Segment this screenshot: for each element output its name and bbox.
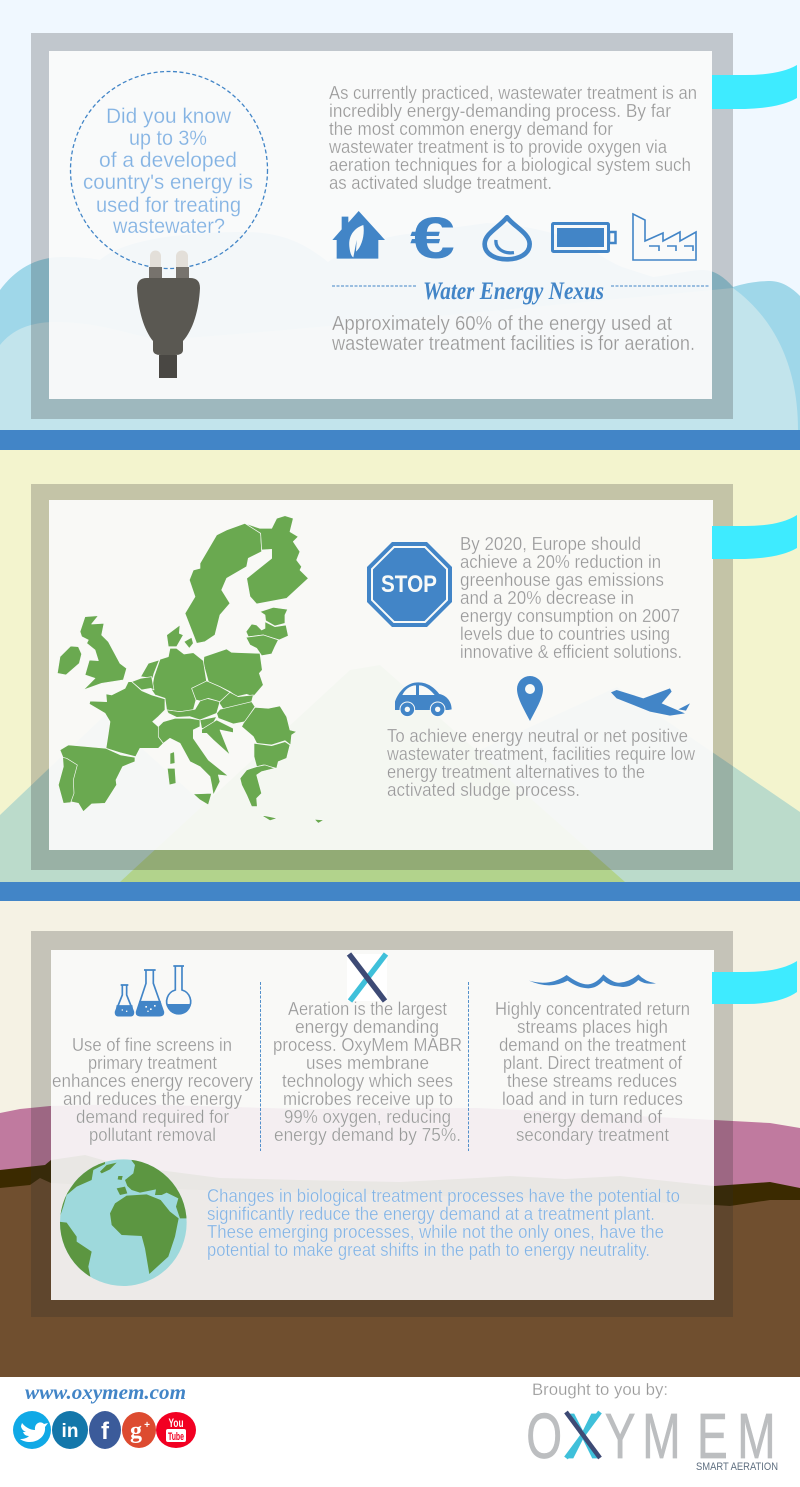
text: aeration intro: As currently practiced, wastewater treatment is an <box>329 83 697 103</box>
panel: energy demand <box>31 33 733 419</box>
social icons: + <box>144 1420 150 1431</box>
ribbon: section 2 <box>712 515 797 559</box>
text: 2020 targets: innovative & efficient solutions. <box>460 642 682 662</box>
social icons: in <box>62 1421 78 1442</box>
text: low energy alternatives: To achieve energy neutral or net positive <box>387 726 688 746</box>
text: oxymem mabr: 99% oxygen, reducing <box>284 1107 451 1127</box>
text: low energy alternatives: activated sludge process. <box>387 780 580 800</box>
text: aeration intro: as activated sludge treatment. <box>329 173 552 193</box>
text: fine screens: primary treatment <box>88 1053 217 1073</box>
icon: water drop <box>485 217 530 259</box>
panel: european targets <box>31 484 733 870</box>
text: low energy alternatives: energy treatment alternatives to the <box>387 762 645 782</box>
text: 2020 targets: achieve a 20% reduction in <box>460 552 661 572</box>
social icons: Tube <box>168 1431 184 1443</box>
text: biological processes: potential to make great shifts in the path to energy neutrality. <box>207 1240 650 1260</box>
text: oxymem mabr <box>273 999 462 1145</box>
social icons <box>13 1411 196 1449</box>
text: oxymem mabr: technology which sees <box>282 1071 453 1091</box>
text: return streams: Highly concentrated return <box>495 999 690 1019</box>
icon: map pin <box>517 676 543 721</box>
social icons: g <box>130 1418 142 1444</box>
text: aeration intro: aeration techniques for a biological system such <box>329 155 691 175</box>
icon: oxymem x <box>347 954 387 1001</box>
text: aeration share: wastewater treatment facilities is for aeration. <box>331 333 695 355</box>
social icons: You <box>168 1416 184 1430</box>
ribbon: section 3 <box>712 961 797 1004</box>
text: aeration intro <box>328 83 697 193</box>
website link: www.oxymem.com <box>25 1380 186 1404</box>
text: return streams: streams places high <box>517 1017 668 1037</box>
logo: oxymem: SMART AERATION <box>696 1461 778 1473</box>
callout: did you know: of a developed <box>99 149 237 172</box>
text: aeration intro: wastewater treatment is to provide oxygen via <box>328 137 668 157</box>
text: aeration intro: the most common energy demand for <box>329 119 613 139</box>
callout: did you know: up to 3% <box>129 127 207 150</box>
text: fine screens: Use of fine screens in <box>72 1035 232 1055</box>
text: biological processes: Changes in biological treatment processes have the potential to <box>207 1186 680 1206</box>
icon: plug <box>137 250 200 378</box>
heading: water energy nexus: Water Energy Nexus <box>423 278 604 305</box>
text: 2020 targets: energy consumption on 2007 <box>460 606 680 626</box>
callout: did you know: Did you know <box>106 105 232 128</box>
text: oxymem mabr: energy demand by 75%. <box>274 1125 461 1145</box>
text: oxymem mabr: process. OxyMem MABR <box>273 1035 462 1055</box>
icon: euro: € <box>410 206 455 271</box>
logo: oxymem: OXYMEM <box>526 1401 776 1472</box>
section 3 background with hills and soil <box>0 901 800 1377</box>
icon: plane <box>611 688 690 716</box>
callout: did you know: country's energy is <box>83 171 253 194</box>
ribbon: section 1 <box>712 65 797 109</box>
icon: car <box>395 682 452 717</box>
text: aeration intro: incredibly energy-demanding process. By far <box>329 101 671 121</box>
text: 2020 targets: levels due to countries using <box>460 624 670 644</box>
icon: factory <box>633 214 696 260</box>
text: fine screens: enhances energy recovery <box>52 1071 253 1091</box>
text: oxymem mabr: Aeration is the largest <box>288 999 447 1019</box>
text: return streams: plant. Direct treatment of <box>503 1053 683 1073</box>
text: biological processes: These emerging processes, while not the only ones, have the <box>207 1222 664 1242</box>
icon: globe <box>58 1157 193 1286</box>
text: 2020 targets: and a 20% decrease in <box>460 588 634 608</box>
text: 2020 targets <box>460 534 682 662</box>
text: 2020 targets: greenhouse gas emissions <box>460 570 664 590</box>
text: aeration share <box>331 313 695 355</box>
text: 2020 targets: By 2020, Europe should <box>460 534 641 554</box>
text: return streams: secondary treatment <box>516 1125 669 1145</box>
text: brought to you by: Brought to you by: <box>532 1380 668 1399</box>
icon: eco house <box>332 211 385 259</box>
text: oxymem mabr: uses membrane <box>306 1053 429 1073</box>
text: return streams <box>495 999 690 1145</box>
callout: did you know: used for treating <box>96 194 241 217</box>
text: low energy alternatives <box>386 726 696 800</box>
section 2 background with mountains <box>0 450 800 901</box>
callout: did you know <box>70 72 268 268</box>
icon: battery <box>552 224 616 252</box>
text: fine screens: demand required for <box>76 1107 229 1127</box>
text: return streams: energy demand of <box>523 1107 663 1127</box>
icon: stop sign <box>367 542 452 627</box>
panel: treatment processes <box>31 931 733 1317</box>
section 1 background with clouds <box>0 0 800 450</box>
text: biological processes: significantly reduce the energy demand at a treatment plant. <box>207 1204 655 1224</box>
text: fine screens: pollutant removal <box>89 1125 216 1145</box>
icon: stop sign: STOP <box>381 571 437 598</box>
text: oxymem mabr: energy demanding <box>295 1017 439 1037</box>
text: return streams: load and in turn reduces <box>502 1089 683 1109</box>
text: fine screens: and reduces the energy <box>63 1089 242 1109</box>
text: return streams: demand on the treatment <box>499 1035 686 1055</box>
text: oxymem mabr: microbes receive up to <box>283 1089 453 1109</box>
text: low energy alternatives: wastewater treatment, facilities require low <box>386 744 696 764</box>
social icons: f <box>101 1418 110 1445</box>
icon: flasks <box>116 966 191 1016</box>
icon: wave <box>529 974 656 988</box>
callout: did you know: wastewater? <box>112 215 225 238</box>
text: biological processes <box>207 1186 680 1260</box>
text: aeration share: Approximately 60% of the energy used at <box>332 313 672 335</box>
text: fine screens <box>52 1035 253 1145</box>
map: europe <box>57 516 324 823</box>
text: return streams: these streams reduces <box>507 1071 677 1091</box>
